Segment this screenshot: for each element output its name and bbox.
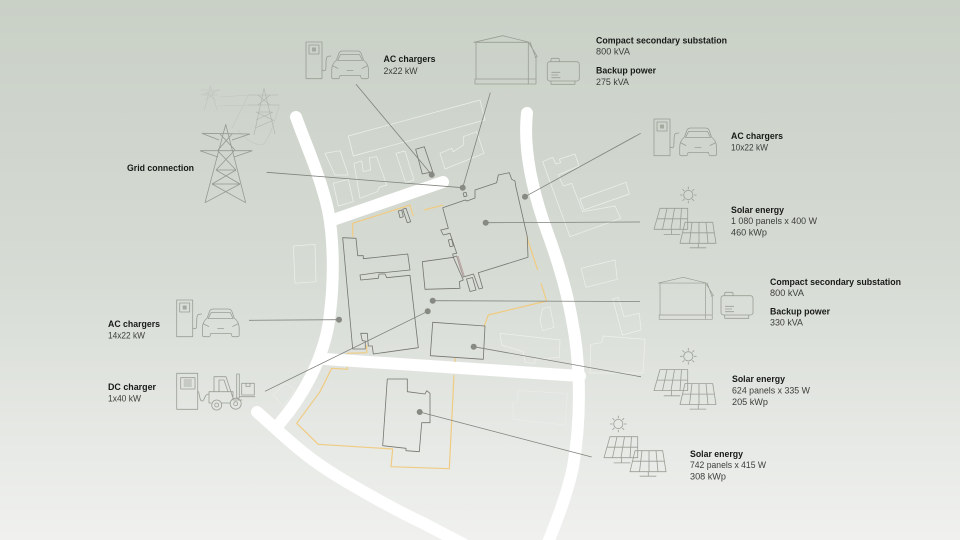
label: substation 800 kVA, backup 330 kVA: 330 kVA (770, 318, 804, 328)
icon: substation and backup generator top (474, 36, 579, 84)
label: DC charger 1x40 kW: 1x40 kW (108, 394, 141, 404)
label: AC chargers 14x22 kW: AC chargers (108, 319, 160, 330)
label: substation 800 kVA, backup 275 kVA (596, 36, 727, 88)
label: substation 800 kVA, backup 275 kVA: Backup power (596, 66, 656, 76)
label: solar energy 460 kWp: Solar energy (731, 205, 785, 216)
icon: AC charger right (654, 119, 716, 156)
icon: solar panels 3 (604, 416, 666, 476)
label: solar energy 205 kWp: 624 panels x 335 W (732, 386, 810, 396)
label: AC chargers 2x22 kW: 2x22 kW (384, 66, 418, 77)
icon: substation and backup generator lower (658, 277, 753, 319)
icon: solar panels 2 (654, 348, 716, 409)
icon: solar panels 1 (654, 187, 716, 248)
label: solar energy 308 kWp: 742 panels x 415 W (690, 460, 766, 471)
label: solar energy 308 kWp (690, 449, 766, 482)
label: solar energy 460 kWp (731, 205, 817, 238)
label: substation 800 kVA, backup 330 kVA: Backup power (770, 306, 830, 318)
map: surrounding buildings (273, 100, 645, 533)
icon: DC charger and forklift (177, 373, 255, 410)
label: substation 800 kVA, backup 330 kVA (770, 277, 901, 328)
label: AC chargers 14x22 kW (108, 319, 160, 342)
label: substation 800 kVA, backup 330 kVA: Compact secondary substation (770, 277, 901, 288)
label: AC chargers 10x22 kW: AC chargers (731, 131, 783, 142)
label: solar energy 460 kWp: 1 080 panels x 400 W (731, 216, 817, 227)
label: substation 800 kVA, backup 275 kVA: Compact secondary substation (596, 36, 727, 46)
leader lines and markers (249, 84, 641, 457)
label: AC chargers 10x22 kW (731, 131, 783, 154)
label: solar energy 308 kWp: 308 kWp (690, 472, 726, 482)
label: solar energy 460 kWp: 460 kWp (731, 228, 767, 238)
label: substation 800 kVA, backup 330 kVA: 800 kVA (770, 288, 805, 299)
label: DC charger 1x40 kW: DC charger (108, 382, 156, 393)
label: solar energy 205 kWp: 205 kWp (732, 397, 768, 408)
label: solar energy 205 kWp: Solar energy (732, 374, 786, 385)
label: solar energy 308 kWp: Solar energy (690, 449, 744, 460)
map: site buildings (343, 147, 528, 452)
label: AC chargers 14x22 kW: 14x22 kW (108, 330, 145, 342)
label: AC chargers 2x22 kW (384, 54, 436, 77)
map: roads (257, 113, 580, 540)
label: AC chargers 10x22 kW: 10x22 kW (731, 142, 768, 154)
label: substation 800 kVA, backup 275 kVA: 800 kVA (596, 46, 631, 58)
label: solar energy 205 kWp (732, 374, 810, 408)
icon: AC charger top (306, 42, 368, 79)
label: AC chargers 2x22 kW: AC chargers (384, 54, 436, 65)
icon: AC charger left (177, 300, 239, 337)
map: cable routes (297, 205, 547, 469)
label: substation 800 kVA, backup 275 kVA: 275 kVA (596, 77, 630, 88)
label: grid connection: Grid connection (127, 163, 194, 174)
label: DC charger 1x40 kW (108, 382, 156, 404)
icon: pylons and power lines (200, 86, 279, 203)
